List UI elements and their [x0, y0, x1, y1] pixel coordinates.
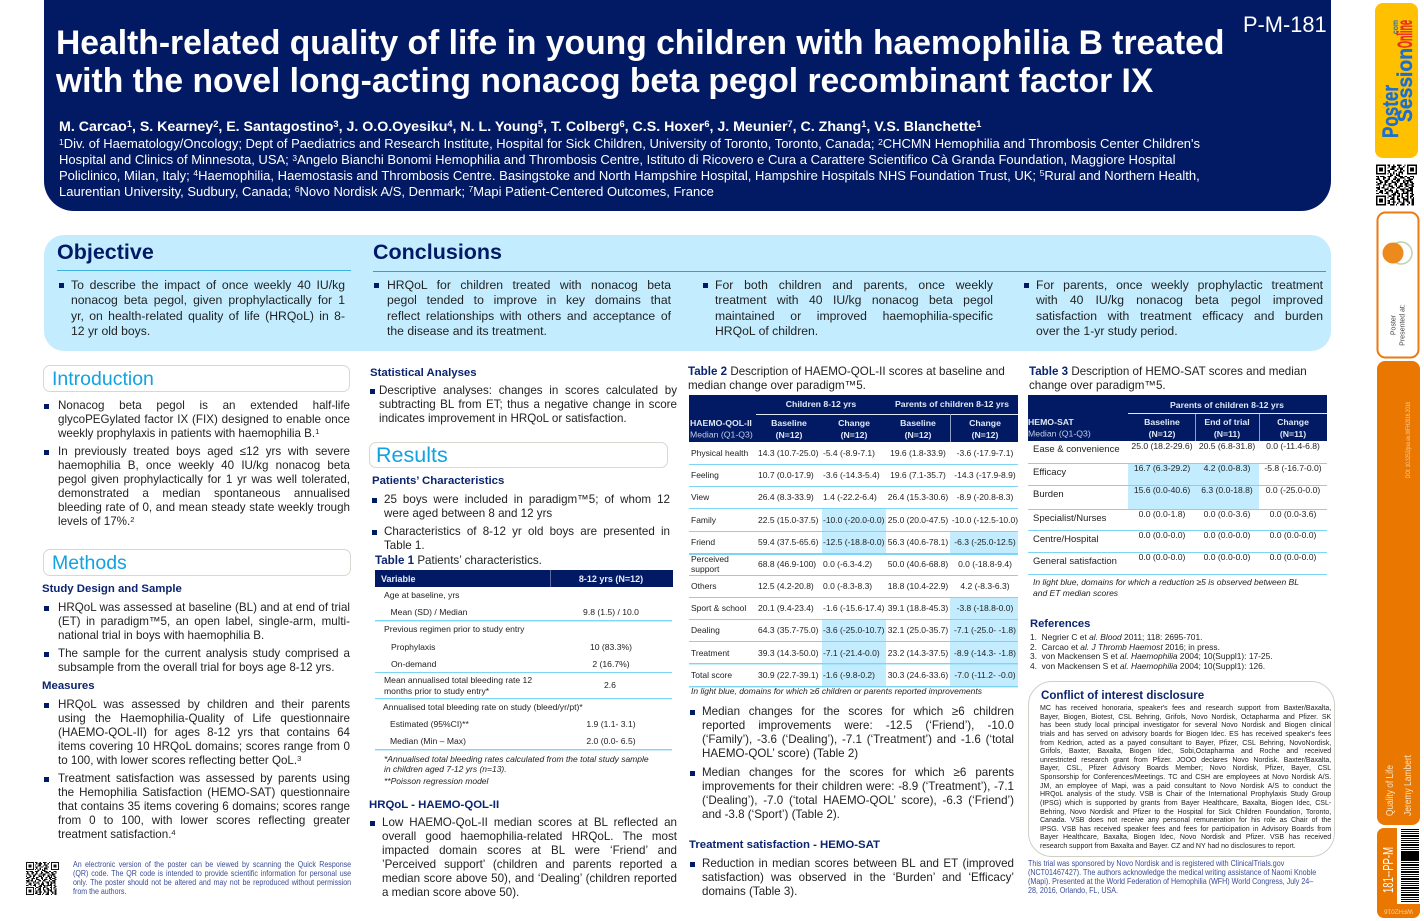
- conclusion 3: satisfaction with treatment efficacy and burden: [1036, 309, 1323, 323]
- table 3: 16.7 (6.3-29.2): [1134, 463, 1190, 473]
- table 2: 56.3 (40.6-78.1): [888, 537, 948, 547]
- measures bullet 2: [44, 772, 350, 841]
- affiliations: 1Div. of Haematology/Oncology; Dept of Paediatrics and Research Institute, Hospital for Sick Children, University of Toronto, Toronto, Canada; 2CHCMN Hemophilia and Thrombosis Center Children's: [59, 136, 1200, 151]
- conflict text: Canada. VSB does not receive any personal remuneration for his role as Chair of the: [1040, 815, 1331, 824]
- table 2: (N=12): [776, 430, 803, 440]
- table 3: Ease & convenience: [1033, 444, 1120, 455]
- table 1: [375, 570, 673, 750]
- introduction bullet 2: haemophilia B, once weekly 40 IU/kg nonacog beta: [58, 459, 350, 472]
- table 1: Mean (SD) / Median: [390, 607, 468, 617]
- table 2: 26.4 (8.3-33.9): [758, 492, 814, 502]
- table 2: -8.9 (-20.8-8.3): [957, 492, 1014, 502]
- conclusion 2: maintained or improved haemophilia-specific: [715, 309, 993, 323]
- affiliations: Laurentian University, Sudbury, Canada; 6Novo Nordisk A/S, Denmark; 7Mapi Patient-Centered Outcomes, France: [59, 184, 714, 199]
- table 1: Mean annualised total bleeding rate 12: [384, 675, 532, 685]
- table 1 footnotes: in children aged 7-12 yrs (n=13).: [384, 764, 507, 774]
- table 2: 18.8 (10.4-22.9): [888, 581, 948, 591]
- table 1: Median (Min – Max): [390, 736, 466, 746]
- measures bullet 1: (HAEMO-QOL-II) for ages 8-12 yrs that contains 64: [58, 726, 350, 739]
- heading: introduction: Introduction: [52, 368, 154, 390]
- QR note: An electronic version of the poster can be viewed by scanning the Quick Response: [73, 860, 351, 869]
- conclusion 1: the disease and its treatment.: [387, 324, 547, 338]
- sidebar: barcode strip: [1377, 828, 1420, 918]
- table 3: 0.0 (0.0-0.0): [1139, 530, 1186, 540]
- table 3: 6.3 (0.0-18.8): [1201, 485, 1253, 495]
- title: with the novel long-acting nonacog beta pegol recombinant factor IX: [56, 62, 1153, 100]
- table 2 bullet 2: [690, 766, 1014, 821]
- table 2: (N=12): [972, 430, 999, 440]
- sidebar: orange topic strip: [1377, 361, 1420, 825]
- table 2: Family: [691, 515, 717, 525]
- table 1: 10 (83.3%): [590, 642, 632, 652]
- HRQoL bullet: [370, 816, 677, 899]
- introduction bullet 2: bleeding rate of 0, and mean steady state weekly trough: [58, 501, 350, 514]
- table 2 title: median change over paradigm™5.: [688, 379, 866, 392]
- table 2: 30.3 (24.6-33.6): [888, 670, 948, 680]
- authors: M. Carcao1, S. Kearney2, E. Santagostino3, J. O.O.Oyesiku4, N. L. Young5, T. Colberg6, C.S. Hoxer6, J. Meunier7, C. Zhang1, V.S. Blanchette1: [59, 119, 981, 135]
- treatment satisfaction bullet: domains (Table 3).: [702, 885, 797, 898]
- table 2 title: [688, 365, 1005, 392]
- table 2: -7.1 (-21.4-0.0): [823, 648, 880, 658]
- table 3: Median (Q1-Q3): [1028, 428, 1091, 438]
- table 2 bullet 2: and -3.8 (‘Sport’) (Table 2).: [702, 808, 840, 821]
- table 3: 20.5 (6.8-31.8): [1199, 441, 1255, 451]
- table 2: Change: [969, 418, 1001, 428]
- references list: [1030, 632, 1273, 670]
- measures bullet 2: from 0 to 100, with lower scores reflecting greater: [58, 814, 350, 827]
- subheading: statistical analyses: Statistical Analyses: [370, 367, 477, 379]
- sidebar logo: PosterSessionOnline: Session: [1394, 48, 1417, 122]
- table 2: -12.5 (-18.8-0.0): [823, 537, 885, 547]
- conflict text: Sponsorship for Conferences/Meetings. TC and CSH are employees at Novo Nordisk A/S.: [1040, 772, 1331, 781]
- table 3: 15.6 (0.0-40.6): [1134, 485, 1190, 495]
- conflict text: has been study local principal investigator for several Novo Nordisk and Biogen clinical: [1040, 720, 1331, 729]
- title: Health-related quality of life in young children with haemophilia B treated: [56, 24, 1224, 62]
- table 1 title: Table 1 Patients’ characteristics.: [375, 554, 542, 567]
- HRQoL bullet: impacted domain scores at BL were ‘Friend’ and: [382, 844, 677, 857]
- table 3: [1028, 395, 1327, 575]
- table 2 note: In light blue, domains for which ≥6 children or parents reported improvements: [691, 686, 982, 696]
- table 2: -8.9 (-14.3- -1.8): [954, 648, 1016, 658]
- patients bullet 1: were aged between 8 and 12 yrs: [384, 507, 552, 520]
- poster number: P-M-181: [1243, 12, 1327, 37]
- panel: objective and conclusions: [44, 235, 1331, 351]
- table 2: -1.6 (-9.8-0.2): [823, 670, 875, 680]
- table 3: Parents of children 8-12 yrs: [1170, 400, 1284, 410]
- heading: methods: Methods: [52, 552, 127, 574]
- table 3: 0.0 (0.0-0.0): [1204, 552, 1251, 562]
- table 1: 2.0 (0.0- 6.5): [586, 736, 636, 746]
- conflict text: IPSG. VSB has received speaker fees and fees for participation in Advisory Boards from: [1040, 824, 1331, 833]
- table 2: Others: [691, 581, 717, 591]
- introduction bullet 2: demonstrated a median spontaneous annualised: [58, 487, 350, 500]
- treatment satisfaction bullet: [690, 857, 1014, 898]
- introduction bullet 2: [44, 445, 350, 528]
- table 2: 23.2 (14.3-37.5): [888, 648, 948, 658]
- affiliations: Hospital and Clinics of Minnesota, USA; 3Angelo Bianchi Bonomi Hemophilia and Thrombosis Centre, Istituto di Ricovero e Cura a Carattere Scientifico Cà Granda Foundation, Maggiore Hospital: [59, 152, 1176, 167]
- table 2: -10.0 (-12.5-10.0): [952, 515, 1018, 525]
- table 3 note: [1033, 577, 1299, 598]
- table 3: 25.0 (18.2-29.6): [1131, 441, 1193, 451]
- table 3 title: [1029, 365, 1307, 392]
- conclusion 3: For parents, once weekly prophylactic treatment: [1036, 278, 1323, 292]
- table 3 title: Table 3 Description of HEMO-SAT scores and median: [1029, 365, 1307, 378]
- conflict text: Behring, Novo Nordisk and Pfizer to the Hospital for Sick Children Foundation, Toronto,: [1040, 806, 1331, 816]
- sponsor note: 28, 2016, Orlando, FL, USA.: [1028, 886, 1118, 895]
- icon: congress logo: [1382, 242, 1412, 264]
- methods bullet 1: [44, 601, 350, 642]
- table 2: 12.5 (4.2-20.8): [758, 581, 814, 591]
- measures bullet 1: items covering 10 HRQoL domains; scores range from 0: [58, 740, 350, 753]
- methods bullet 1: national trial in boys with haemophilia B.: [58, 629, 264, 642]
- table 2: 68.8 (46.9-100): [758, 559, 816, 569]
- table 2: HAEMO-QOL-II: [690, 418, 752, 428]
- table 3: 0.0 (0.0-1.8): [1139, 509, 1186, 519]
- table 2 bullet 2: improvements for their children were: -8.9 (‘Treatment’), -7.1: [702, 780, 1014, 793]
- table 3: 0.0 (0.0-3.6): [1270, 509, 1317, 519]
- table 2: -7.0 (-11.2- -0.0): [954, 670, 1016, 680]
- table 2: (N=12): [841, 430, 868, 440]
- QR code: electronic poster: [26, 862, 59, 895]
- table 2: Feeling: [691, 470, 719, 480]
- table 2: -10.0 (-20.0-0.0): [823, 515, 885, 525]
- table 2 title: Table 2 Description of HAEMO-QOL-II scores at baseline and: [688, 365, 1005, 378]
- conflict text: Bayer Healthcare, Baxalta, Biogen Idec, Novo Nordisk and Pfizer. VSB has received: [1040, 832, 1331, 841]
- table 1: Prophylaxis: [391, 642, 435, 652]
- table 2: Total score: [691, 670, 732, 680]
- HRQoL bullet: median score above 50), and ‘Dealing’ (children reported: [382, 872, 677, 885]
- conflict text: Grifols, Baxter, Baxalta, Biogen Idec, Sobi,Octapharma and Roche and received: [1040, 746, 1331, 755]
- conflict text: trials and has served on advisory boards for Biogen Idec. ES has received speaker's fees: [1040, 729, 1331, 738]
- title: [56, 24, 1224, 100]
- table 3: End of trial: [1204, 417, 1250, 427]
- sidebar logo: PosterSessionOnline: [1375, 3, 1418, 158]
- table 2: 14.3 (10.7-25.0): [758, 448, 819, 458]
- heading: methods: [43, 549, 351, 576]
- table 2: Sport & school: [691, 603, 746, 613]
- sidebar: presented at box: Presented at:: [1400, 304, 1406, 346]
- table 1: 2 (16.7%): [592, 659, 630, 669]
- sponsor note: (NCT01467427). The authors acknowledge the medical writing assistance of Naomi Knoble: [1028, 868, 1316, 877]
- objective text: [59, 278, 345, 338]
- table 2 bullet 1: reported improvements were: -12.5 (‘Friend’), -10.0: [702, 719, 1014, 732]
- subheading: treatment satisfaction: Treatment satisfaction - HEMO-SAT: [689, 839, 880, 851]
- affiliations: [59, 136, 1200, 199]
- sidebar: orange topic strip: DOI: 10.3252/pso.eu.WFH2016.2016: [1406, 401, 1412, 478]
- measures bullet 2: the Hemophilia Satisfaction (HEMO-SAT) questionnaire: [58, 786, 350, 799]
- table 3: Specialist/Nurses: [1033, 513, 1107, 524]
- conclusion 1: pegol tended to improve in key domains that: [387, 293, 671, 307]
- table 2: support: [691, 564, 720, 574]
- measures bullet 1: using the Haemophilia-Quality of Life questionnaire: [58, 712, 350, 725]
- table 2: Median (Q1-Q3): [690, 430, 753, 440]
- statistical analyses bullet: Descriptive analyses: changes in scores calculated by: [379, 384, 677, 397]
- sponsor note: [1028, 859, 1316, 895]
- table 2: Parents of children 8-12 yrs: [895, 399, 1009, 409]
- conclusion 3: [1024, 278, 1323, 338]
- QR note: (QR) code. The QR code is intended to provide scientific information for personal use: [73, 869, 351, 878]
- table 2: -14.3 (-17.9-8.9): [954, 470, 1016, 480]
- introduction bullet 1: weekly prophylaxis in patients with haemophilia B.1: [58, 427, 319, 440]
- QR note: only. The poster should not be altered and may not be reproduced without permission: [73, 878, 351, 887]
- introduction bullet 2: levels of 17%.2: [58, 515, 134, 528]
- table 3: 0.0 (0.0-0.0): [1204, 530, 1251, 540]
- affiliations: Policlinico, Milan, Italy; 4Haemophilia, Haemostasis and Thrombosis Centre. Basingstoke and North Hampshire Hospital, Hampshire Hospitals NHS Foundation Trust, UK; 5Rural and Northern Health,: [59, 168, 1200, 183]
- introduction bullet 1: glycoPEGylated factor IX (FIX) designed to enable once: [58, 413, 350, 426]
- sidebar logo: PosterSessionOnline: .com: [1391, 20, 1400, 36]
- conclusion 1: reflect relationships with others and acceptance of: [387, 309, 671, 323]
- measures bullet 1: [44, 698, 350, 767]
- methods bullet 1: (ET) in paradigm™5, an open label, single-arm, multi-: [58, 615, 350, 628]
- table 2 bullet 1: [690, 705, 1014, 760]
- conflict text: HRQoL analysis of the study. VSB is Chair of the International Prophylaxis Study Group: [1040, 789, 1331, 798]
- table 2 bullet 1: Median changes for the scores for which ≥6 children: [702, 705, 1014, 718]
- table 2: 39.3 (14.3-50.0): [758, 648, 819, 658]
- subheading: HRQoL: HRQoL - HAEMO-QOL-II: [369, 799, 499, 811]
- measures bullet 2: that contains 35 items covering 6 domains; scores range: [58, 800, 350, 813]
- HRQoL bullet: overall good haemophilia-related HRQoL. The most: [382, 830, 677, 843]
- conflict text: from Kedrion, acted as a payed consultant to Bayer, Pfizer, CSL Behring, NovoNordisk,: [1040, 738, 1331, 746]
- table 1: Previous regimen prior to study entry: [384, 624, 525, 634]
- objective text: nonacog beta pegol, given prophylactically for 1: [71, 293, 345, 307]
- table 2: Physical health: [691, 448, 748, 458]
- sponsor note: (Mapi). Presented at the World Federation of Hemophilia (WFH) World Congress, July 24–: [1028, 877, 1313, 886]
- table 2: 4.2 (-8.3-6.3): [960, 581, 1010, 591]
- measures bullet 1: to 100, with lower scores reflecting better QoL.3: [58, 754, 301, 767]
- references list: 2. Carcao et al. J Thromb Haemost 2016; in press.: [1030, 642, 1220, 652]
- table 3: 4.2 (0.0-8.3): [1204, 463, 1251, 473]
- table 2: -3.6 (-17.9-7.1): [957, 448, 1014, 458]
- introduction bullet 1: [44, 399, 350, 440]
- table 2: Friend: [691, 537, 715, 547]
- subheading: patients characteristics: Patients’ Characteristics: [372, 475, 504, 487]
- objective heading: Objective: [57, 240, 154, 264]
- table 1: Variable: [381, 574, 416, 584]
- table 1 footnotes: **Poisson regression model: [384, 776, 488, 786]
- conflict text: Bayer, CSL, Pfizer Advisory Boards Member; Novo Nordisk, Pfizer, Bayer, CSL: [1040, 763, 1331, 772]
- patients bullet 2: Table 1.: [384, 539, 425, 552]
- table 2: [689, 395, 1018, 688]
- table 3 note: and ET median scores: [1033, 588, 1118, 598]
- conclusion 2: HRQoL of children.: [715, 324, 818, 338]
- table 1: 1.9 (1.1- 3.1): [586, 719, 636, 729]
- methods bullet 1: HRQoL was assessed at baseline (BL) and at end of trial: [58, 601, 350, 614]
- table 3: 0.0 (0.0-0.0): [1139, 552, 1186, 562]
- table 2: 26.4 (15.3-30.6): [888, 492, 948, 502]
- statistical analyses bullet: [370, 384, 677, 425]
- heading: results: Results: [376, 443, 448, 467]
- barcode: [1397, 828, 1420, 904]
- conclusion 2: For both children and parents, once weekly: [715, 278, 993, 292]
- conclusion 1: HRQoL for children treated with nonacog beta: [387, 278, 671, 292]
- statistical analyses bullet: indicates improvement in HRQoL or satisfaction.: [379, 412, 627, 425]
- measures bullet 2: Treatment satisfaction was assessed by parents using: [58, 772, 350, 785]
- objective text: To describe the impact of once weekly 40 IU/kg: [71, 278, 345, 292]
- table 1 footnotes: *Annualised total bleeding rates calculated from the total study sample: [384, 754, 649, 764]
- table 1: 9.8 (1.5) / 10.0: [583, 607, 639, 617]
- patients bullet 2: [372, 525, 670, 552]
- QR note: from the authors.: [73, 887, 126, 896]
- table 2: View: [691, 492, 710, 502]
- references list: 1. Negrier C et al. Blood 2011; 118: 2695-701.: [1030, 632, 1202, 642]
- sidebar logo: PosterSessionOnline: Poster: [1378, 85, 1403, 138]
- heading: results: [369, 442, 668, 468]
- statistical analyses bullet: subtracting BL from ET; thus a negative change in score: [379, 398, 677, 411]
- introduction bullet 2: In previously treated boys aged ≤12 yrs with severe: [58, 445, 350, 458]
- conflict text: unrestricted research grant from Pfizer. JOOO declares Novo Nordisk. Baxter/Baxalta,: [1040, 755, 1331, 764]
- table 1: months prior to study entry*: [384, 686, 490, 696]
- table 2: 22.5 (15.0-37.5): [758, 515, 819, 525]
- conflict text: (IPSG) which is supported by grants from Bayer Healthcare, Baxalta, Biogen Idec, CSL-: [1040, 798, 1331, 807]
- table 2 bullet 1: (‘Family’), -3.6 (‘Dealing’), -7.1 (‘Treatment’) and -1.6 (‘total: [702, 733, 1014, 746]
- table 2: Baseline: [900, 418, 936, 428]
- table 2: Children 8-12 yrs: [786, 399, 856, 409]
- table 3: 0.0 (-11.4-6.8): [1266, 441, 1320, 451]
- table 3: HEMO-SAT: [1028, 417, 1074, 427]
- conclusion 2: [703, 278, 993, 338]
- introduction bullet 1: Nonacog beta pegol is an extended half-life: [58, 399, 350, 412]
- table 3: Burden: [1033, 489, 1064, 500]
- table 2: 59.4 (37.5-65.6): [758, 537, 819, 547]
- treatment satisfaction bullet: satisfaction) was observed in the ‘Burden’ and ‘Efficacy’: [702, 871, 1014, 884]
- table 3: 0.0 (0.0-0.0): [1270, 530, 1317, 540]
- table 2: -3.6 (-25.0-10.7): [823, 625, 885, 635]
- table 2: 1.4 (-22.2-6.4): [823, 492, 877, 502]
- objective text: 12 yr old boys.: [71, 324, 150, 338]
- table 2: 30.9 (22.7-39.1): [758, 670, 819, 680]
- conflict text: Bayer, Biogen, Biotest, CSL Behring, Grifols, Novo Nordisk, Octapharma and Pfizer. SK: [1040, 712, 1331, 721]
- references heading: References: [1030, 618, 1090, 630]
- sidebar: orange topic strip: Jeremy Lambert: [1402, 755, 1414, 816]
- sidebar: presented at box: Poster: [1390, 314, 1398, 335]
- references list: 3. von Mackensen S et al. Haemophilia 2004; 10(Suppl1): 17-25.: [1030, 651, 1273, 661]
- table 2: 50.0 (40.6-68.8): [888, 559, 948, 569]
- conclusion 3: with 40 IU/kg nonacog beta pegol improved: [1036, 293, 1323, 307]
- table 2: 64.3 (35.7-75.0): [758, 625, 819, 635]
- table 2: 32.1 (25.0-35.7): [888, 625, 948, 635]
- table 3 title: change over paradigm™5.: [1029, 379, 1166, 392]
- table 2: Baseline: [771, 418, 807, 428]
- table 1: 2.6: [604, 680, 616, 690]
- sidebar: orange topic strip: Quality of Life: [1384, 765, 1396, 816]
- methods bullet 2: [44, 647, 350, 674]
- heading: introduction: [43, 365, 350, 392]
- references list: 4. von Mackensen S et al. Haemophilia 2004; 10(Suppl1): 126.: [1030, 660, 1265, 670]
- introduction bullet 2: pegol given prophylactically for 1 yr was well tolerated,: [58, 473, 350, 486]
- measures bullet 1: HRQoL was assessed by children and their parents: [58, 698, 350, 711]
- patients bullet 1: 25 boys were included in paradigm™5; of whom 12: [384, 493, 670, 506]
- conflict text: JM, an employee of Mapi, was a paid consultant to Novo Nordisk A/S to conduct the: [1040, 781, 1331, 790]
- table 2: 10.7 (0.0-17.9): [758, 470, 814, 480]
- conclusions heading: Conclusions: [373, 240, 502, 264]
- treatment satisfaction bullet: Reduction in median scores between BL and ET (improved: [702, 857, 1014, 870]
- table 2: -7.1 (-25.0- -1.8): [954, 625, 1016, 635]
- sidebar QR code: [1376, 164, 1417, 206]
- table 2: -3.8 (-18.8-0.0): [957, 603, 1014, 613]
- table 3: (N=12): [1149, 429, 1176, 439]
- table 2: (N=12): [905, 430, 932, 440]
- table 2: 0.0 (-8.3-8.3): [823, 581, 872, 591]
- table 1: Estimated (95%CI)**: [390, 719, 469, 729]
- conclusion 1: [374, 278, 671, 338]
- subheading: study design: Study Design and Sample: [42, 583, 182, 595]
- table 2: 19.6 (7.1-35.7): [890, 470, 946, 480]
- table 3: Baseline: [1144, 417, 1180, 427]
- table 2: -3.6 (-14.3-5.4): [823, 470, 880, 480]
- table 2: -6.3 (-25.0-12.5): [954, 537, 1016, 547]
- panel: conflict of interest: [1028, 681, 1335, 857]
- table 3: (N=11): [1280, 429, 1306, 439]
- table 2: Dealing: [691, 625, 720, 635]
- table 3: -5.8 (-16.7-0.0): [1264, 463, 1322, 473]
- table 2 bullet 1: HAEMO-QOL’ score) (Table 2): [702, 747, 858, 760]
- HRQoL bullet: a median score above 50).: [382, 886, 519, 899]
- table 3 note: In light blue, domains for which a reduction ≥5 is observed between BL: [1033, 577, 1299, 587]
- table 3: 0.0 (0.0-3.6): [1204, 509, 1251, 519]
- table 2: -1.6 (-15.6-17.4): [823, 603, 885, 613]
- patients bullet 2: Characteristics of 8-12 yr old boys are presented in: [384, 525, 670, 538]
- table 2: 25.0 (20.0-47.5): [888, 515, 948, 525]
- table 3: Change: [1277, 417, 1309, 427]
- table 3: 0.0 (-25.0-0.0): [1266, 485, 1320, 495]
- table 2: 0.0 (-6.3-4.2): [823, 559, 872, 569]
- table 1: Annualised total bleeding rate on study (bleed/yr/pt)*: [383, 702, 583, 712]
- table 2: 0.0 (-18.8-9.4): [958, 559, 1012, 569]
- methods bullet 2: The sample for the current analysis study comprised a: [58, 647, 350, 660]
- table 1: 8-12 yrs (N=12): [579, 574, 643, 584]
- conflict heading: Conflict of interest disclosure: [1041, 688, 1204, 702]
- table 2: -5.4 (-8.9-7.1): [823, 448, 875, 458]
- table 2: 19.6 (1.8-33.9): [890, 448, 946, 458]
- table 2: Treatment: [691, 648, 730, 658]
- table 3: (N=11): [1214, 429, 1240, 439]
- table 3: Centre/Hospital: [1033, 534, 1098, 545]
- table 2 bullet 2: (‘Dealing’), -7.0 (‘total HAEMO-QOL’ score), -6.3 (‘Friend’): [702, 794, 1014, 807]
- conflict text: research support from Baxalta and Bayer. CZ and NY had no disclosures to report.: [1040, 841, 1296, 850]
- subheading: measures: Measures: [42, 680, 95, 692]
- table 1 footnotes: [384, 754, 649, 786]
- conflict text: [1040, 703, 1331, 850]
- sidebar: presented at box: [1376, 212, 1420, 358]
- HRQoL bullet: ’Perceived support’ (children and parents reported a: [382, 858, 677, 871]
- table 3: 0.0 (0.0-0.0): [1270, 552, 1317, 562]
- conclusion 3: over the 1-yr study period.: [1036, 324, 1178, 338]
- table 1: On-demand: [391, 659, 437, 669]
- sidebar: barcode strip: WFH2016: [1384, 908, 1413, 914]
- table 1: Age at baseline, yrs: [384, 590, 459, 600]
- table 3: Efficacy: [1033, 467, 1066, 478]
- table 2: 39.1 (18.8-45.3): [888, 603, 948, 613]
- sponsor note: This trial was sponsored by Novo Nordisk and is registered with ClinicalTrials.gov: [1028, 859, 1284, 868]
- header banner: [44, 0, 1331, 211]
- table 2: Change: [838, 418, 870, 428]
- measures bullet 2: treatment satisfaction.4: [58, 828, 176, 841]
- methods bullet 2: subsample from the overall trial for boys age 8-12 yrs.: [58, 661, 334, 674]
- objective text: yr, on health-related quality of life (HRQoL) in 8-: [71, 309, 345, 323]
- conflict text: MC has received honoraria, speaker's fees and research support from Baxter/Baxalta,: [1040, 703, 1331, 712]
- patients bullet 1: [372, 493, 670, 520]
- table 2: 20.1 (9.4-23.4): [758, 603, 814, 613]
- QR note: [73, 860, 351, 896]
- table 3: General satisfaction: [1033, 556, 1117, 567]
- table 2: Perceived: [691, 554, 729, 564]
- conclusion 2: treatment with 40 IU/kg nonacog beta pegol: [715, 293, 993, 307]
- HRQoL bullet: Low HAEMO-QoL-II median scores at BL reflected an: [382, 816, 677, 829]
